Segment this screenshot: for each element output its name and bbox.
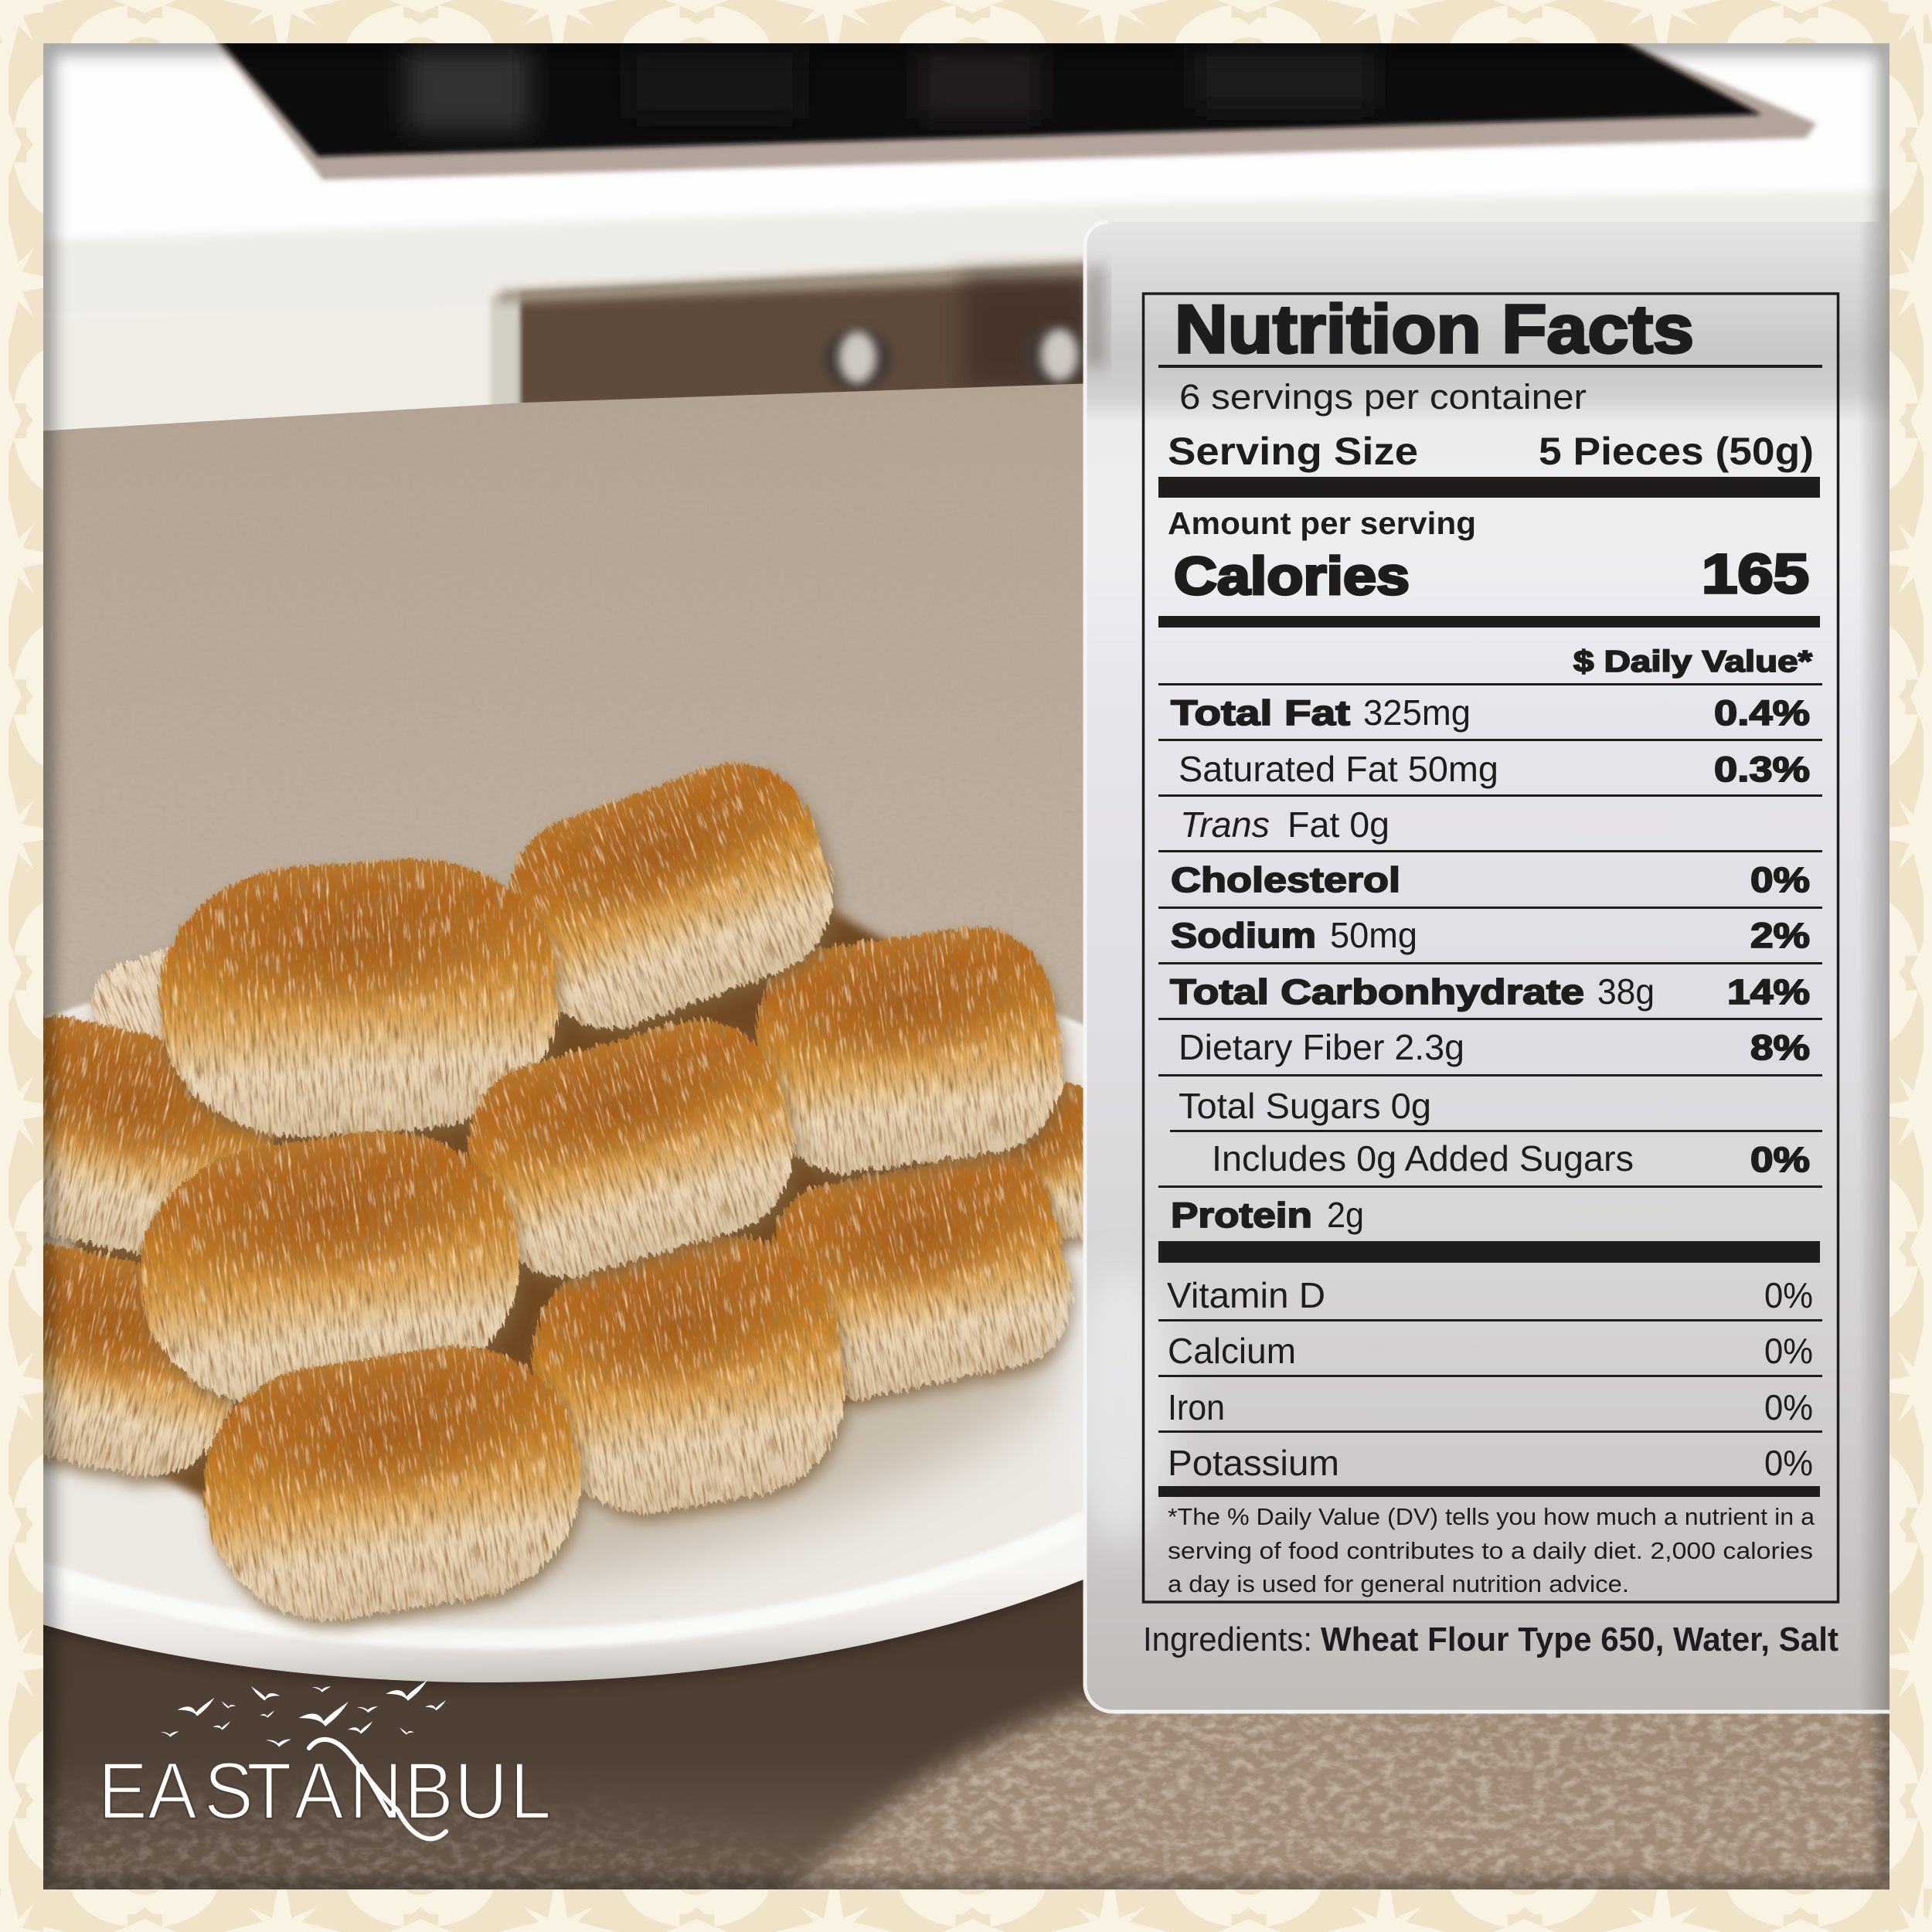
label outer border [1144, 294, 1838, 1602]
nutrient rows: Protein [1171, 1196, 1312, 1235]
nutrient rows: 325mg [1363, 692, 1471, 733]
vitamins and minerals: Iron [1168, 1387, 1225, 1427]
brand logo [98, 1680, 551, 1838]
servings block: Serving Size [1168, 430, 1418, 473]
calories block: 165 [1702, 544, 1809, 605]
vitamins and minerals: Calcium [1168, 1331, 1296, 1371]
footnote [1168, 1503, 1815, 1597]
ingredients line: Wheat Flour Type 650, Water, Salt [1321, 1621, 1838, 1658]
lower cabinet and drawer [37, 261, 1097, 434]
panel dark reflection at left [1085, 267, 1105, 367]
vitamins and minerals: 0% [1764, 1443, 1813, 1483]
plate shadow beneath rolls [284, 1250, 1096, 1658]
calories block: Amount per serving [1168, 505, 1476, 541]
nutrient rows: Fat 0g [1287, 804, 1389, 845]
vitamins and minerals: 0% [1764, 1275, 1813, 1315]
vitamins and minerals: 0% [1764, 1331, 1813, 1371]
frosted nutrition panel [1066, 222, 1889, 1712]
nutrient rows: 14% [1727, 972, 1810, 1012]
nutrient rows: 0% [1750, 860, 1810, 900]
nutrient rows: Saturated Fat 50mg [1179, 749, 1498, 789]
nutrient rows: 8% [1750, 1028, 1810, 1067]
vitamins and minerals: Vitamin D [1167, 1275, 1325, 1315]
nutrient rows: Trans [1180, 804, 1270, 845]
footnote: a day is used for general nutrition advice. [1168, 1570, 1629, 1597]
black cooktop [212, 37, 1816, 180]
nutrient rows: Cholesterol [1171, 860, 1400, 900]
footnote: *The % Daily Value (DV) tells you how much a nutrient in a [1168, 1503, 1815, 1530]
drawer knobs [823, 328, 892, 392]
vitamins and minerals: Potassium [1168, 1443, 1339, 1483]
vitamins and minerals [1158, 1275, 1822, 1497]
nutrient rows: 0.3% [1714, 750, 1810, 789]
servings block: 5 Pieces (50g) [1539, 430, 1814, 473]
nutrient rows: Total Carbonhydrate [1170, 972, 1584, 1012]
white kitchen counter [43, 43, 1889, 315]
logo birds [161, 1680, 446, 1747]
servings block [1158, 365, 1822, 498]
nutrient rows [1158, 683, 1822, 1263]
servings block: 6 servings per container [1179, 377, 1587, 417]
kunafa rolls [0, 740, 1140, 1638]
nutrient rows: Dietary Fiber 2.3g [1179, 1027, 1464, 1067]
nutrient rows: Total Sugars 0g [1179, 1086, 1431, 1126]
logo wordmark: EASTANBUL [98, 1747, 551, 1836]
logo swoosh on the N [309, 1740, 446, 1838]
white plate [0, 912, 1379, 1710]
panel right shading [1859, 222, 1889, 1712]
nutrient rows: Total Fat [1171, 693, 1350, 733]
footnote: serving of food contributes to a daily diet. 2,000 calories [1168, 1537, 1813, 1564]
nutrition facts label [1144, 291, 1838, 1602]
nutrient rows: 38g [1597, 971, 1655, 1012]
panel rim [1085, 222, 1889, 1712]
nutrient rows: Includes 0g Added Sugars [1212, 1138, 1634, 1179]
calories block: $ Daily Value* [1573, 645, 1813, 679]
calories block [1158, 505, 1820, 679]
nutrient rows: 0% [1750, 1140, 1810, 1179]
calories block: Calories [1174, 546, 1410, 606]
ingredients line: Ingredients: [1143, 1621, 1312, 1658]
nutrient rows: Sodium [1171, 916, 1316, 955]
nutrient rows: 50mg [1330, 915, 1417, 955]
heading: Nutrition Facts [1175, 291, 1694, 367]
nutrient rows: 2g [1327, 1195, 1364, 1235]
panel light reflection [1066, 1267, 1175, 1546]
nutrient rows: 0.4% [1714, 693, 1810, 733]
tablecloth [37, 383, 1897, 1897]
nutrient rows: 2% [1750, 916, 1810, 955]
vitamins and minerals: 0% [1764, 1387, 1813, 1427]
